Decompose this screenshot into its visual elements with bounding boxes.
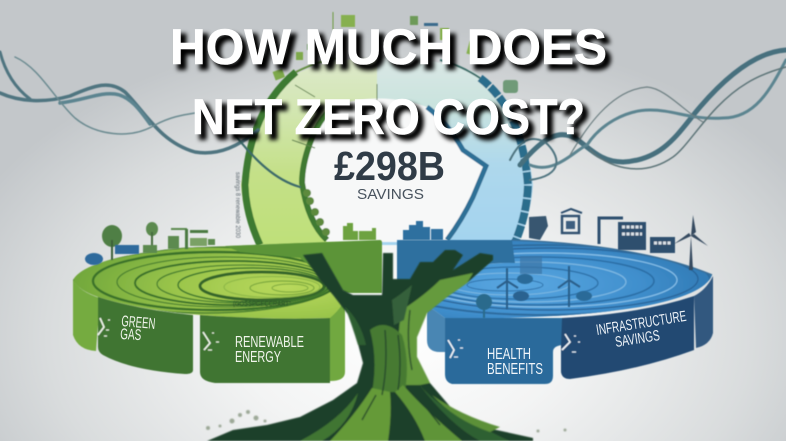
title: HOW MUCH DOES [170,19,607,75]
icon: solar panels [529,216,548,240]
ring outer edges [245,72,296,245]
wires right [510,50,786,180]
green disc top [73,243,345,319]
panel: renewable energy [200,315,330,383]
green gas label [120,313,156,344]
health benefits label: BENEFITS [487,361,543,378]
inner bushes [303,189,330,236]
crack marks [98,318,210,350]
panel: health benefits [445,318,562,384]
blue disc top [397,240,712,318]
infrastructure savings label [595,308,688,351]
health benefits label: HEALTH [487,346,531,363]
green gas label: GREEN [121,313,156,333]
panel: green gas [98,297,193,374]
icons: blue skyline [403,209,708,318]
tree trunk and roots [207,250,533,441]
title: NET ZERO COST? [197,94,590,150]
tree [206,250,566,441]
blue right wall [694,276,713,348]
rim micro text: savings 8 renewable 2030 [234,172,240,239]
blue back block [397,240,515,292]
icons: green skyline [85,222,376,265]
infrastructure savings label: INFRASTRUCTURE [595,308,688,339]
ground moss [206,410,566,432]
wires left [0,52,300,187]
renewable energy label: RENEWABLE [235,334,304,351]
infrastructure savings label: SAVINGS [614,327,661,351]
panel: blue disc [380,240,713,384]
green side wall [73,280,100,351]
title: HOW MUCH DOES [175,24,612,80]
disc wind turbines [497,268,518,309]
icon: wind turbine [674,215,708,270]
disc micro text: (GOSSPGECCRART" [233,299,291,308]
savings figure: SAVINGS [357,186,424,203]
title: NET ZERO COST? [192,89,585,145]
blue left wall [427,305,445,352]
green back block [225,240,382,293]
icons on ring [273,12,548,240]
renewable energy label [235,334,304,366]
title [170,19,612,150]
bark lines [362,310,440,425]
panel: infrastructure savings [561,296,694,379]
renewable energy label: ENERGY [235,349,281,366]
panel: green disc [70,240,382,383]
savings figure: £298B [334,143,445,189]
circular savings ring [234,58,533,245]
ring hole [303,98,488,242]
tree green highlights [398,273,473,385]
green gas label: GAS [120,326,142,344]
crack marks blue [448,334,570,358]
health benefits label [487,346,543,378]
